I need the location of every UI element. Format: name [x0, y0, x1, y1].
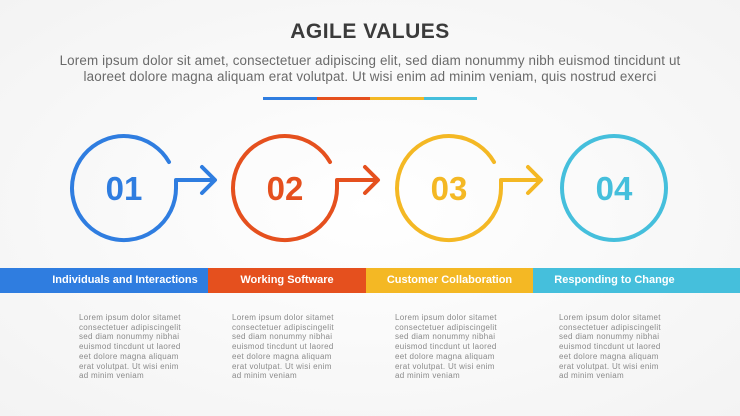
body text 1: Lorem ipsum dolor sitamet: [79, 313, 181, 322]
body text 1: eet dolore magna aliquam: [79, 352, 179, 361]
step 04 circle: 04: [596, 170, 633, 207]
step 02 circle: 02: [267, 170, 303, 207]
body text 2: [232, 313, 334, 380]
body text 3: eet dolore magna aliquam: [395, 352, 495, 361]
body text 2: erat volutpat. Ut wisi enim: [232, 362, 332, 371]
body text 3: [395, 313, 497, 380]
subtitle text: laoreet dolore magna aliquam erat volutpat. Ut wisi enim ad minim veniam, quis nostrud exerci: [84, 69, 656, 84]
step 03 circle: 03: [431, 170, 467, 207]
label: Customer Collaboration: Customer Collaboration: [387, 274, 512, 286]
subtitle text: [60, 53, 680, 84]
body text 1: erat volutpat. Ut wisi enim: [79, 362, 179, 371]
body text 3: sed diam nonummy nibhai: [395, 332, 495, 341]
body text 2: euismod tincdunt ut laored: [232, 342, 334, 351]
body text 4: [559, 313, 661, 380]
step 01 circle: 01: [106, 170, 142, 207]
label: Customer Collaboration: [366, 268, 533, 293]
circles chart: [70, 134, 668, 242]
title: AGILE VALUES: [290, 20, 450, 43]
body text 3: ad minim veniam: [395, 371, 460, 380]
body text 4: Lorem ipsum dolor sitamet: [559, 313, 661, 322]
subtitle text: Lorem ipsum dolor sit amet, consectetuer adipiscing elit, sed diam nonummy nibh euismod tincidunt ut: [60, 53, 680, 68]
body text 1: [79, 313, 181, 380]
body text 4: euismod tincdunt ut laored: [559, 342, 661, 351]
step 01 circle: [72, 136, 215, 240]
step 02 circle: [233, 136, 378, 240]
body text 3: consectetuer adipiscingelit: [395, 323, 497, 332]
step 04 circle: [562, 136, 666, 240]
divider colored line: [263, 97, 477, 100]
body text 3: Lorem ipsum dolor sitamet: [395, 313, 497, 322]
label: Working Software: Working Software: [240, 274, 334, 286]
body text 4: erat volutpat. Ut wisi enim: [559, 362, 659, 371]
body text 4: consectetuer adipiscingelit: [559, 323, 661, 332]
body text 2: sed diam nonummy nibhai: [232, 332, 332, 341]
body text 2: eet dolore magna aliquam: [232, 352, 332, 361]
label: Individuals and Interactions: Individuals and Interactions: [52, 274, 198, 286]
body text 1: sed diam nonummy nibhai: [79, 332, 179, 341]
body text 1: consectetuer adipiscingelit: [79, 323, 181, 332]
label: Responding to Change: Responding to Change: [554, 274, 675, 286]
body text 2: consectetuer adipiscingelit: [232, 323, 334, 332]
body text 3: erat volutpat. Ut wisi enim: [395, 362, 495, 371]
body text 2: Lorem ipsum dolor sitamet: [232, 313, 334, 322]
body text 2: ad minim veniam: [232, 371, 297, 380]
step 03 circle: [397, 136, 541, 240]
body text 1: euismod tincdunt ut laored: [79, 342, 181, 351]
label: Individuals and Interactions: [0, 268, 208, 293]
body text 3: euismod tincdunt ut laored: [395, 342, 497, 351]
body text 4: eet dolore magna aliquam: [559, 352, 659, 361]
body text 1: ad minim veniam: [79, 371, 144, 380]
label: Responding to Change: [533, 268, 740, 293]
label: Working Software: [208, 268, 366, 293]
body text 4: sed diam nonummy nibhai: [559, 332, 659, 341]
body text 4: ad minim veniam: [559, 371, 624, 380]
